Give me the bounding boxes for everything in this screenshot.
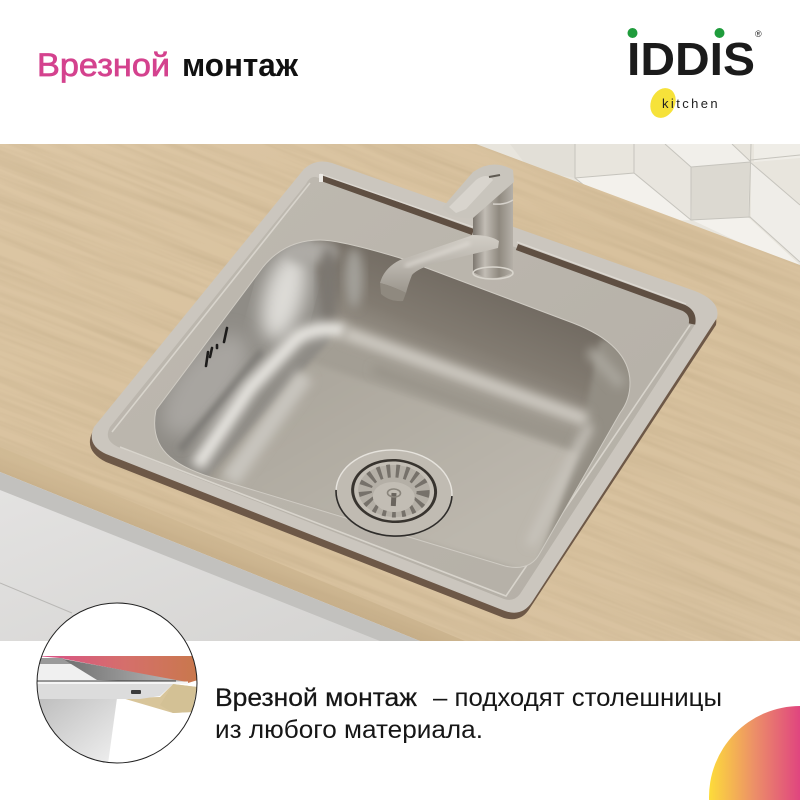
drain strainer <box>334 447 454 539</box>
inset: cross-section of countertop mounting <box>36 603 198 764</box>
body text <box>215 684 722 744</box>
faucet spout <box>380 235 499 293</box>
faucet handle <box>442 164 514 218</box>
body text: Врезной монтаж <box>215 684 417 712</box>
sink bowl <box>155 240 630 566</box>
title: монтаж <box>182 47 298 83</box>
logo: IDDIS kitchen: ® <box>755 29 762 39</box>
title <box>37 47 298 83</box>
title: Врезной <box>37 47 170 83</box>
faucet <box>380 164 514 301</box>
logo: IDDIS kitchen: IDDIS <box>627 33 755 85</box>
tiled wall <box>470 144 800 274</box>
wooden countertop <box>0 144 800 641</box>
decorative gradient corner circle <box>709 706 800 800</box>
lower cabinet <box>0 472 420 641</box>
body text: из любого материала. <box>215 716 483 744</box>
drip channel <box>322 178 692 324</box>
photo: sink in countertop <box>0 144 800 641</box>
bowl highlights <box>146 240 622 545</box>
countertop front edge <box>0 447 465 641</box>
overflow slots <box>206 328 227 366</box>
faucet body <box>473 183 513 278</box>
logo: IDDIS kitchen <box>627 28 762 122</box>
sink plate <box>90 161 718 619</box>
logo: IDDIS kitchen: kitchen <box>662 96 720 111</box>
body text: – подходят столешницы <box>433 684 722 712</box>
